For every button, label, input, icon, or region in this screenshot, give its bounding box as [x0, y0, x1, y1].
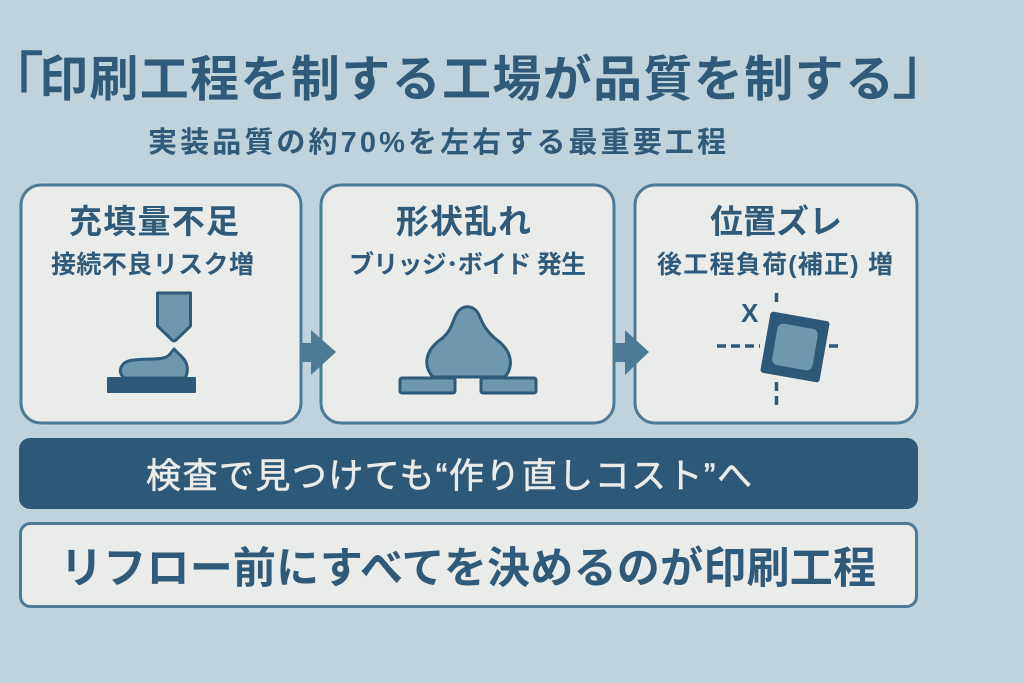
heading: shape disorder: 形状乱れ — [396, 203, 531, 240]
callout: printing decides everything — [20, 524, 916, 606]
heading: insufficient fill: 充填量不足 — [69, 203, 239, 240]
callout: printing decides everything: リフロー前にすべてを決めるのが印刷工程 — [60, 545, 876, 593]
heading: misalignment: 位置ズレ — [710, 203, 842, 240]
text: downstream burden: 後工程負荷(補正) 増 — [657, 251, 893, 279]
icon: nozzle and paste deposit — [107, 293, 196, 393]
panel: misalignment — [635, 185, 917, 423]
title: 」 — [892, 35, 956, 107]
text: connection failure risk: 接続不良リスク増 — [51, 251, 254, 279]
arrow: second to third card — [614, 330, 649, 375]
subtitle: 実装品質の約70%を左右する最重要工程 — [148, 126, 726, 159]
panel: shape disorder — [321, 185, 614, 423]
icon: misshapen paste on pads — [400, 307, 536, 393]
title — [0, 35, 956, 119]
banner: rework cost — [19, 438, 918, 509]
arrow: first to second card — [301, 330, 336, 375]
text: bridges and voids: ブリッジ･ボイド 発生 — [349, 250, 586, 279]
banner: rework cost: 検査で見つけても“作り直しコスト”へ — [146, 457, 752, 496]
panel: insufficient fill — [21, 185, 301, 423]
icon: rotated chip on crosshair: X — [741, 298, 759, 328]
icon: rotated chip on crosshair — [717, 293, 839, 407]
title: 印刷工程を制する工場が品質を制する — [39, 53, 894, 107]
